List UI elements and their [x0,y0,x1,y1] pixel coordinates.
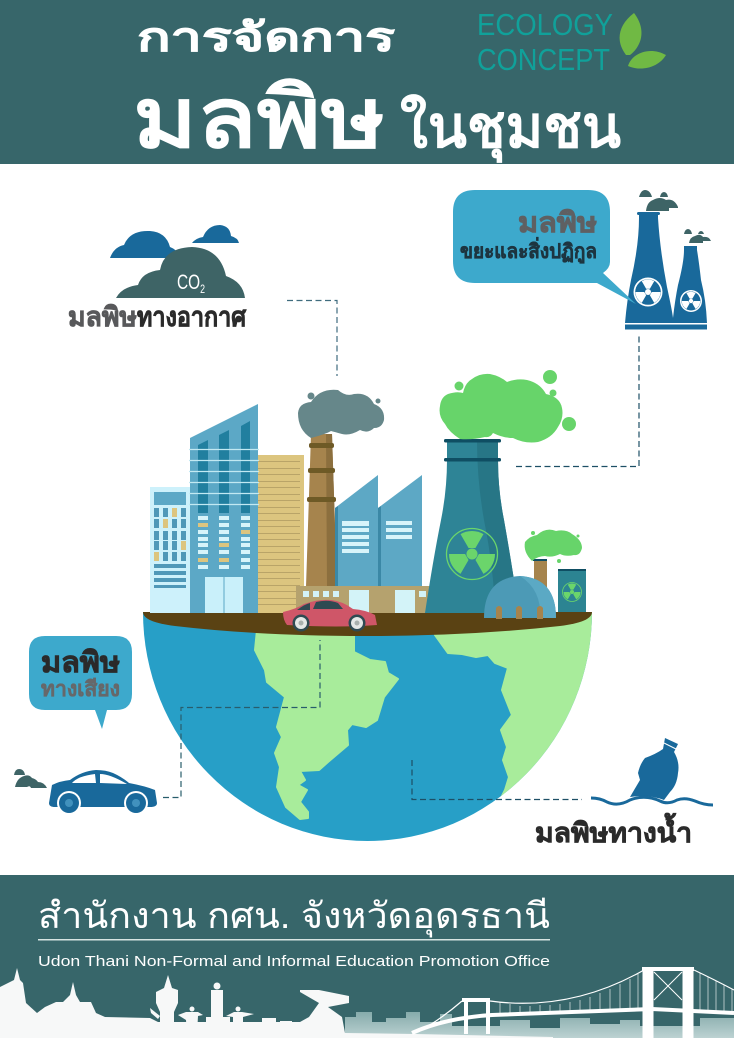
smoke: green large [440,370,576,442]
icon: blue car [49,770,157,815]
globe [143,612,620,841]
icon: blue clouds [110,225,239,258]
title line 2 end: ในชุมชน [400,93,621,164]
factory sheds [335,475,422,587]
CO2 label: 2 [200,282,205,296]
air pollution cluster [68,225,247,332]
icon: twin chimneys [625,190,711,330]
city skyline [150,370,586,632]
waste heading: มลพิษ [518,207,597,238]
icon: exhaust clouds [14,769,47,788]
label: air pollution part 2: ทางอากาศ [137,302,247,332]
concept text: CONCEPT [477,42,610,77]
silhouette: bridge [412,969,734,1038]
continent: right [434,612,592,796]
title line 1: การจัดการ [137,16,396,60]
noise subheading: ทางเสียง [41,677,120,701]
connector: water [412,760,582,800]
building: light tower [150,487,190,613]
small stack and smoke [525,530,582,590]
speech bubble: noise [29,636,132,729]
icon: leaves [620,13,666,69]
chimney: brown [306,434,337,587]
skyline backdrop [345,1012,734,1038]
icon: CO2 cloud [116,247,245,298]
connector: noise [163,640,320,798]
office name thai: สำนักงาน กศน. จังหวัดอุดรธานี [38,895,550,938]
icon: red car [283,600,377,632]
water pollution cluster [535,738,713,848]
building: beige [258,455,304,613]
label: air pollution: มลพิษ [68,302,137,332]
cooling tower [425,439,519,613]
connector: waste [516,335,639,466]
silhouette: landmarks [0,968,553,1038]
icon: water wave [591,797,713,805]
waste pollution cluster [453,190,711,330]
title main word: มลพิษ [133,71,385,165]
dome [484,576,556,619]
continent: south america [255,620,398,819]
icon: plastic bottle [630,738,678,800]
ground disc [143,612,592,636]
header band [0,0,734,165]
CO2 label: CO [177,271,208,294]
ecology text: ECOLOGY [477,7,613,42]
noise pollution cluster [14,636,157,815]
label: water pollution: มลพิษทางน้ำ [535,812,692,848]
waste subheading: ขยะและสิ่งปฏิกูล [460,236,597,265]
smoke: grey [298,390,384,438]
building: blue tower [189,404,259,613]
footer band [0,875,734,1038]
connector: air [287,300,337,376]
speech bubble: waste [453,190,636,304]
noise heading: มลพิษ [41,647,120,679]
low building [296,586,433,613]
barrel [558,569,586,612]
office name english: Udon Thani Non-Formal and Informal Education Promotion Office [38,953,550,970]
